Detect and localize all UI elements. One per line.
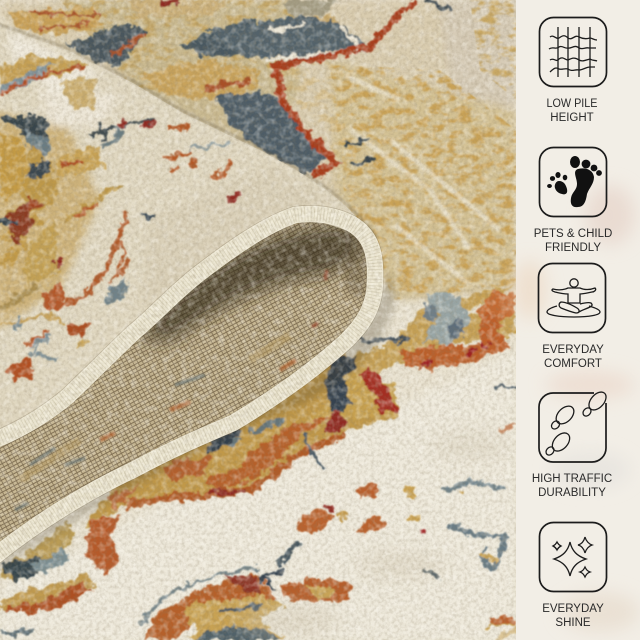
rolled rug underside <box>0 214 375 556</box>
label: high traffic durability <box>532 473 612 499</box>
label: everyday shine: SHINE <box>555 617 591 629</box>
label: everyday shine: EVERYDAY <box>542 603 604 615</box>
dabs next to the medallion <box>345 0 450 165</box>
label: everyday comfort: EVERYDAY <box>542 344 604 356</box>
label: high traffic durability: DURABILITY <box>538 487 606 499</box>
shadow beneath roll <box>0 270 396 572</box>
icon: low pile height <box>540 18 606 86</box>
band beneath the roll <box>85 335 400 530</box>
rolled rug top flap <box>0 25 375 440</box>
top motif <box>10 8 105 35</box>
label: high traffic durability: HIGH TRAFFIC <box>532 473 612 485</box>
right medallion band <box>315 285 516 390</box>
icon: high traffic durability <box>539 389 609 462</box>
flap pattern <box>0 55 240 382</box>
gold stipple: upper right floor <box>60 0 516 300</box>
flap top edge shadow <box>0 23 377 238</box>
label: low pile height: HEIGHT <box>550 112 594 124</box>
icon: everyday comfort <box>538 264 606 332</box>
red medallion outline <box>275 0 415 178</box>
label: pets and child friendly: PETS & CHILD <box>534 228 612 240</box>
label: low pile height <box>546 98 598 124</box>
beige shading on floor <box>240 431 510 634</box>
label: low pile height: LOW PILE <box>546 98 598 110</box>
side panel <box>514 0 640 640</box>
icon: pets and child friendly <box>540 148 606 216</box>
inner shadow <box>135 225 359 340</box>
label: everyday shine <box>542 603 604 629</box>
icon: everyday shine <box>540 522 606 592</box>
scattered floor fragments <box>355 484 378 498</box>
rug bindings <box>0 214 375 556</box>
label: everyday comfort: COMFORT <box>544 358 602 370</box>
faint pattern on underside <box>15 270 327 510</box>
label: everyday comfort <box>542 344 604 370</box>
label: pets and child friendly: FRIENDLY <box>545 242 601 254</box>
bottom motif <box>145 575 275 640</box>
label: pets and child friendly <box>534 228 612 254</box>
lower-left motif <box>205 415 335 490</box>
